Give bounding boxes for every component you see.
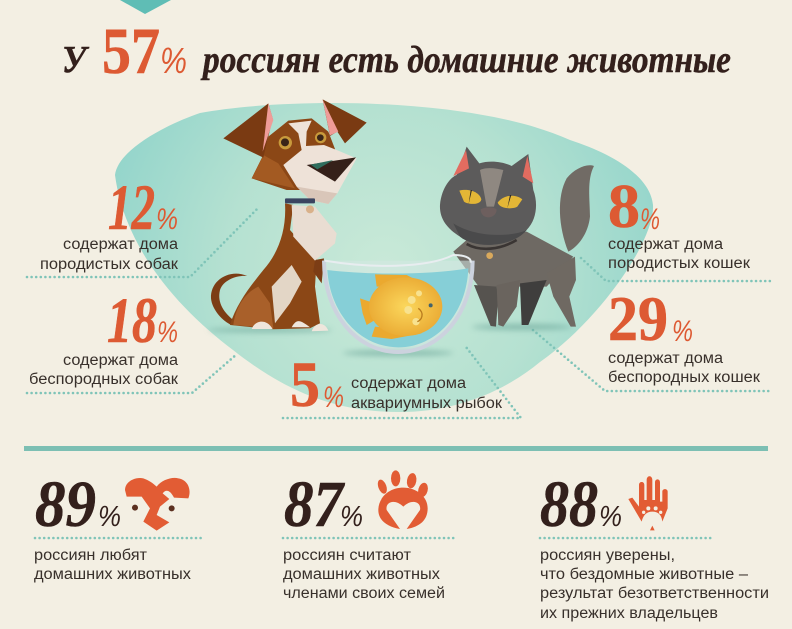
connector: purebred dogs: [27, 208, 258, 277]
title: россиян есть домашние животные: [200, 39, 731, 81]
stat: 18% mixed dogs: %: [157, 316, 178, 349]
stat: 8% purebred cats: %: [640, 203, 660, 236]
stat: 12% purebred dogs: %: [156, 203, 178, 236]
stat: 18% mixed dogs: 18: [107, 285, 157, 357]
connector: fish: [283, 347, 521, 418]
stat: 87% family members: [283, 468, 455, 602]
stat: 89% love pets: [34, 468, 205, 583]
stat: 87% family members: членами своих семей: [283, 585, 445, 602]
stat: 18% mixed dogs: содержат дома: [63, 352, 178, 369]
stat: 88% irresponsibility: %: [599, 501, 622, 533]
top diamond tab: [120, 0, 171, 14]
connector: purebred cats: [581, 258, 771, 281]
stat: 88% irresponsibility: их прежних владельцев: [540, 605, 718, 622]
stat: 8% purebred cats: [608, 173, 750, 272]
icon: paw with heart: [376, 470, 429, 529]
title: 57: [102, 15, 160, 88]
title: [62, 15, 731, 88]
stat: 89% love pets: %: [98, 501, 121, 533]
stat: 8% purebred cats: содержат дома: [608, 236, 723, 253]
illustration: dog: [211, 99, 367, 331]
stat: 12% purebred dogs: [40, 172, 178, 273]
stat: 29% mixed cats: %: [672, 315, 693, 348]
connector: mixed cats: [533, 330, 771, 391]
illustration: cat: [440, 147, 594, 327]
stat: 8% purebred cats: породистых кошек: [608, 255, 750, 272]
stat: 87% family members: россиян считают: [283, 547, 411, 564]
stat: 18% mixed dogs: беспородных собак: [29, 371, 178, 388]
stat: 5% aquarium fish: аквариумных рыбок: [351, 395, 502, 412]
stat: 87% family members: %: [340, 501, 363, 533]
stat: 88% irresponsibility: россиян уверены,: [540, 547, 675, 564]
stat: 88% irresponsibility: что бездомные животные –: [540, 566, 748, 583]
stat: 8% purebred cats: 8: [608, 173, 640, 241]
icon: heart with dog and cat: [125, 478, 190, 531]
teal background blob: [115, 103, 653, 412]
stat: 89% love pets: 89: [35, 468, 96, 541]
stat: 88% irresponsibility: 88: [540, 468, 598, 541]
stat: 12% purebred dogs: содержат дома: [63, 236, 178, 253]
stat: 89% love pets: домашних животных: [34, 566, 191, 583]
stat: 89% love pets: россиян любят: [34, 547, 147, 564]
stat: 88% irresponsibility: результат безответственности: [540, 585, 769, 602]
stat: 12% purebred dogs: 12: [108, 172, 155, 244]
stat: 88% irresponsibility: [540, 468, 769, 622]
stat: 87% family members: 87: [284, 468, 346, 541]
stat: 18% mixed dogs: [29, 285, 178, 388]
stat: 5% aquarium fish: содержат дома: [351, 375, 466, 392]
stat: 29% mixed cats: 29: [608, 284, 668, 354]
stat: 12% purebred dogs: породистых собак: [40, 256, 178, 273]
title: %: [160, 40, 187, 81]
stat: 29% mixed cats: беспородных кошек: [608, 369, 760, 386]
stat: 29% mixed cats: содержат дома: [608, 350, 723, 367]
stat: 87% family members: домашних животных: [283, 566, 440, 583]
illustration: fish bowl: [324, 255, 473, 352]
stat: 29% mixed cats: [608, 284, 760, 386]
icon: hand with paw: [628, 476, 668, 530]
stat: 5% aquarium fish: 5: [290, 349, 320, 421]
connector: mixed dogs: [27, 354, 237, 393]
stat: 5% aquarium fish: %: [323, 381, 344, 414]
title: У: [62, 39, 89, 81]
ground shadows: [208, 324, 572, 356]
stat: 5% aquarium fish: [290, 349, 502, 421]
